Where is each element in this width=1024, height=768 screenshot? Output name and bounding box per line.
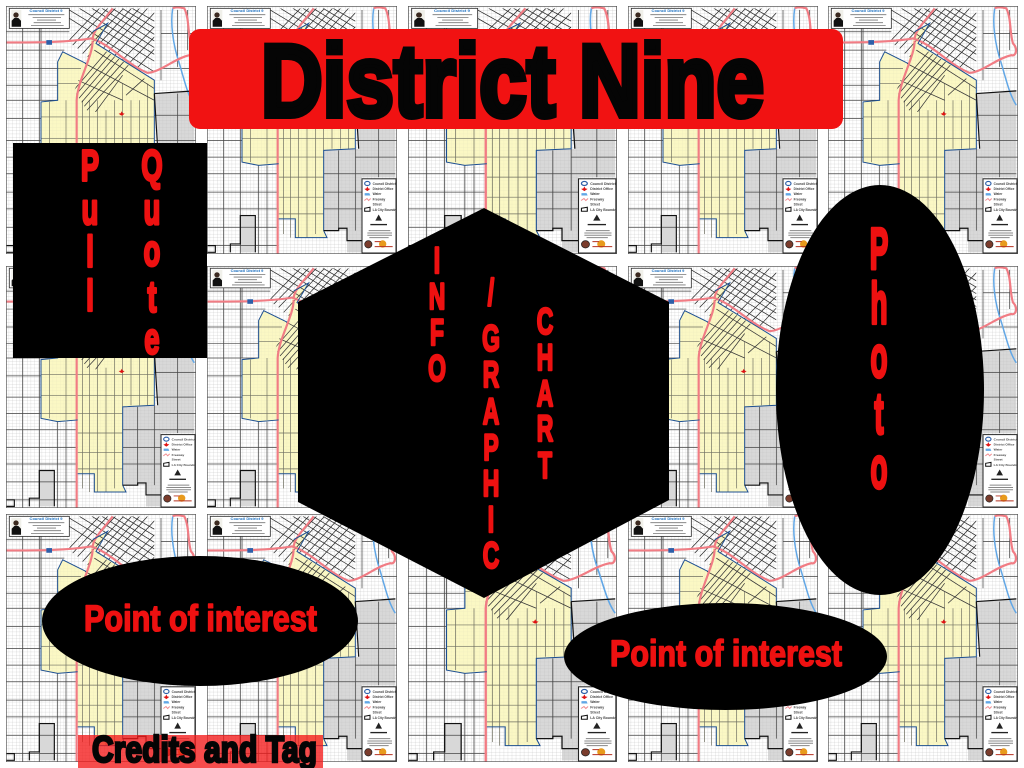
vertical text: CHART bbox=[537, 300, 553, 486]
map tile row 1 column 2 bbox=[207, 6, 399, 254]
vertical text: CHART: C bbox=[537, 300, 553, 342]
vertical text: INFO: I bbox=[434, 239, 440, 281]
vertical text: Quote: u bbox=[144, 184, 160, 234]
map tile row 3 column 2 bbox=[207, 514, 399, 762]
vertical text: Photo: P bbox=[870, 216, 888, 281]
vertical text: Photo: t bbox=[874, 381, 884, 446]
vertical text: Quote: t bbox=[147, 272, 157, 321]
map tile row 1 column 4 bbox=[628, 6, 820, 254]
map tile row 2 column 5 bbox=[828, 266, 1020, 508]
title banner bbox=[189, 24, 843, 138]
vertical text: CHART: R bbox=[537, 407, 553, 449]
map tile row 2 column 4 bbox=[628, 266, 820, 508]
vertical text: /GRAPHIC: C bbox=[483, 534, 499, 576]
vertical text: Pull: l bbox=[86, 271, 94, 320]
map tile row 2 column 1 bbox=[6, 266, 198, 508]
vertical text: CHART: T bbox=[538, 444, 552, 486]
vertical text: Quote: Q bbox=[141, 141, 163, 190]
map tile row 1 column 5 bbox=[828, 6, 1020, 254]
vertical text: Quote: o bbox=[144, 226, 160, 275]
vertical text: Pull: u bbox=[82, 184, 98, 234]
vertical text: Photo: h bbox=[870, 271, 888, 336]
vertical text: Photo bbox=[870, 216, 888, 501]
vertical text: CHART: A bbox=[537, 372, 553, 414]
point of interest label: Point of interest bbox=[84, 598, 317, 639]
vertical text: Photo: o bbox=[870, 325, 888, 390]
vertical text: /GRAPHIC: R bbox=[483, 353, 499, 395]
vertical text: Photo: o bbox=[870, 436, 888, 501]
credits and tag bar bbox=[78, 729, 323, 768]
panel: point of interest left bbox=[42, 556, 358, 686]
point of interest label: Point of interest bbox=[610, 633, 842, 674]
panel: info graphic chart hexagon bbox=[298, 208, 669, 598]
vertical text: /GRAPHIC: H bbox=[483, 462, 499, 504]
panel: pull quote bbox=[13, 141, 207, 363]
vertical text: Quote bbox=[141, 141, 163, 363]
title text: District Nine bbox=[261, 24, 764, 138]
map tile row 1 column 3 bbox=[408, 6, 620, 254]
vertical text: CHART: H bbox=[537, 336, 553, 378]
panel: photo ellipse bbox=[776, 185, 984, 595]
map tile row 3 column 3 bbox=[408, 514, 620, 762]
vertical text: Pull: l bbox=[86, 227, 94, 276]
vertical text: /GRAPHIC: I bbox=[488, 498, 494, 540]
map tile row 2 column 2 bbox=[207, 266, 399, 508]
vertical text: Pull bbox=[81, 141, 99, 320]
vertical text: /GRAPHIC: / bbox=[488, 271, 495, 313]
panel: point of interest right bbox=[564, 603, 887, 710]
vertical text: /GRAPHIC: P bbox=[483, 426, 499, 468]
vertical text: INFO: O bbox=[428, 347, 446, 389]
map tile row 3 column 4 bbox=[628, 514, 820, 762]
map tile row 1 column 1 bbox=[6, 6, 198, 254]
vertical text: INFO: F bbox=[430, 311, 444, 353]
map tile row 3 column 5 bbox=[828, 514, 1020, 762]
vertical text: INFO: N bbox=[429, 275, 445, 317]
vertical text: Quote: e bbox=[144, 314, 160, 363]
vertical text: INFO bbox=[428, 239, 446, 389]
map tile row 2 column 3 bbox=[408, 266, 620, 508]
map tile row 3 column 1 bbox=[6, 514, 198, 762]
vertical text: /GRAPHIC bbox=[482, 271, 500, 576]
vertical text: /GRAPHIC: G bbox=[482, 317, 500, 359]
vertical text: Pull: P bbox=[81, 141, 99, 190]
vertical text: /GRAPHIC: A bbox=[483, 390, 499, 432]
